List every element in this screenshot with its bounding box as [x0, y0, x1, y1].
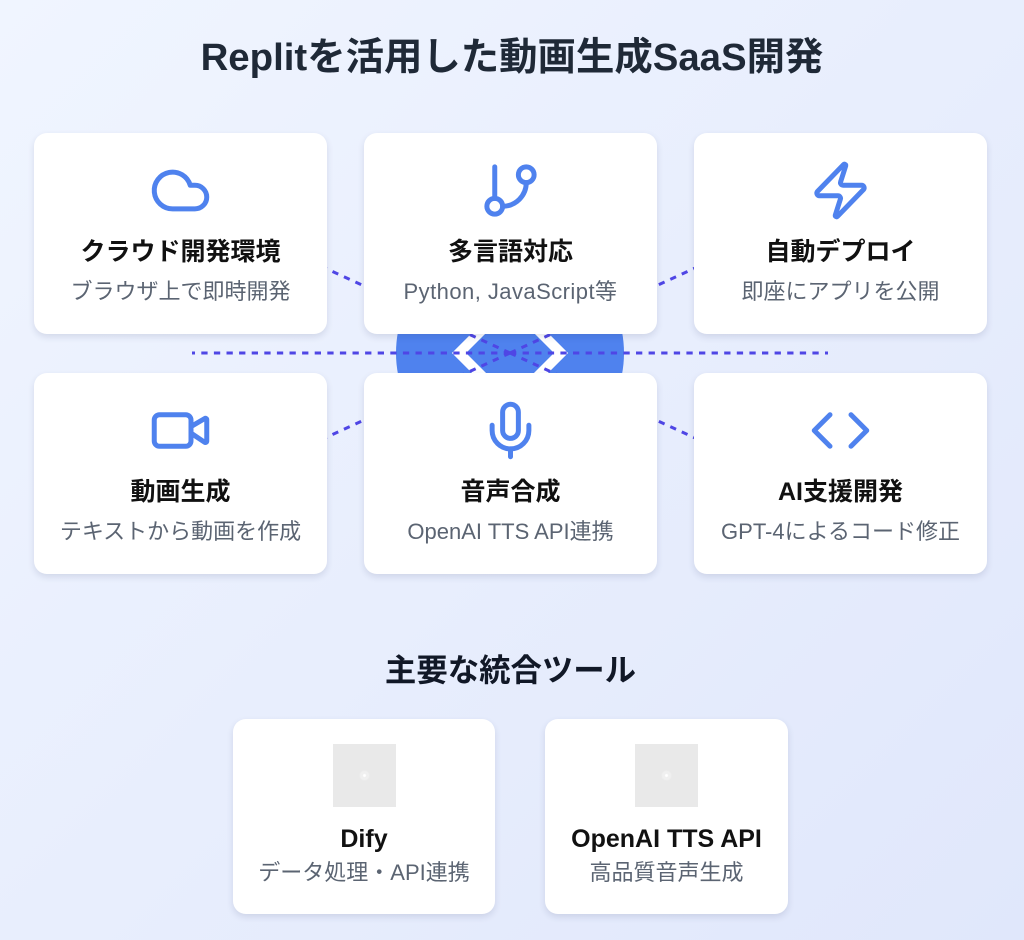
panel: Dify — [233, 719, 495, 914]
description: 即座にアプリを公開 — [741, 279, 940, 304]
panel: multi-language — [364, 133, 657, 334]
icon: lightning — [814, 162, 867, 220]
icon: cloud — [152, 170, 210, 212]
heading: 多言語対応 — [448, 238, 573, 266]
icon: microphone — [490, 402, 532, 460]
panel: auto deploy — [694, 133, 987, 334]
image placeholder — [635, 744, 698, 807]
panel: OpenAI TTS API — [545, 719, 788, 914]
description: GPT-4によるコード修正 — [721, 519, 960, 544]
heading: クラウド開発環境 — [80, 238, 280, 266]
description: テキストから動画を作成 — [60, 519, 301, 544]
heading: Dify — [340, 825, 388, 853]
description: OpenAI TTS API連携 — [407, 519, 614, 544]
panel: speech synthesis — [364, 373, 657, 574]
panel: cloud development — [34, 133, 327, 334]
description: データ処理・API連携 — [258, 860, 470, 885]
image placeholder — [333, 744, 396, 807]
heading: OpenAI TTS API — [571, 825, 762, 853]
description: ブラウザ上で即時開発 — [70, 279, 290, 304]
icon: video camera — [152, 412, 210, 449]
description: Python, JavaScript等 — [404, 279, 617, 304]
icon: git branch — [484, 164, 537, 217]
heading: 音声合成 — [460, 478, 560, 506]
heading: 動画生成 — [130, 478, 230, 506]
icon: code brackets — [812, 412, 870, 449]
heading: 自動デプロイ — [765, 238, 916, 266]
description: 高品質音声生成 — [589, 860, 744, 885]
panel: video generation — [34, 373, 327, 574]
panel: AI-assisted development — [694, 373, 987, 574]
title: Replitを活用した動画生成SaaS開発 — [201, 36, 823, 79]
heading: AI支援開発 — [778, 478, 903, 506]
section heading: integration tools: 主要な統合ツール — [385, 653, 636, 688]
